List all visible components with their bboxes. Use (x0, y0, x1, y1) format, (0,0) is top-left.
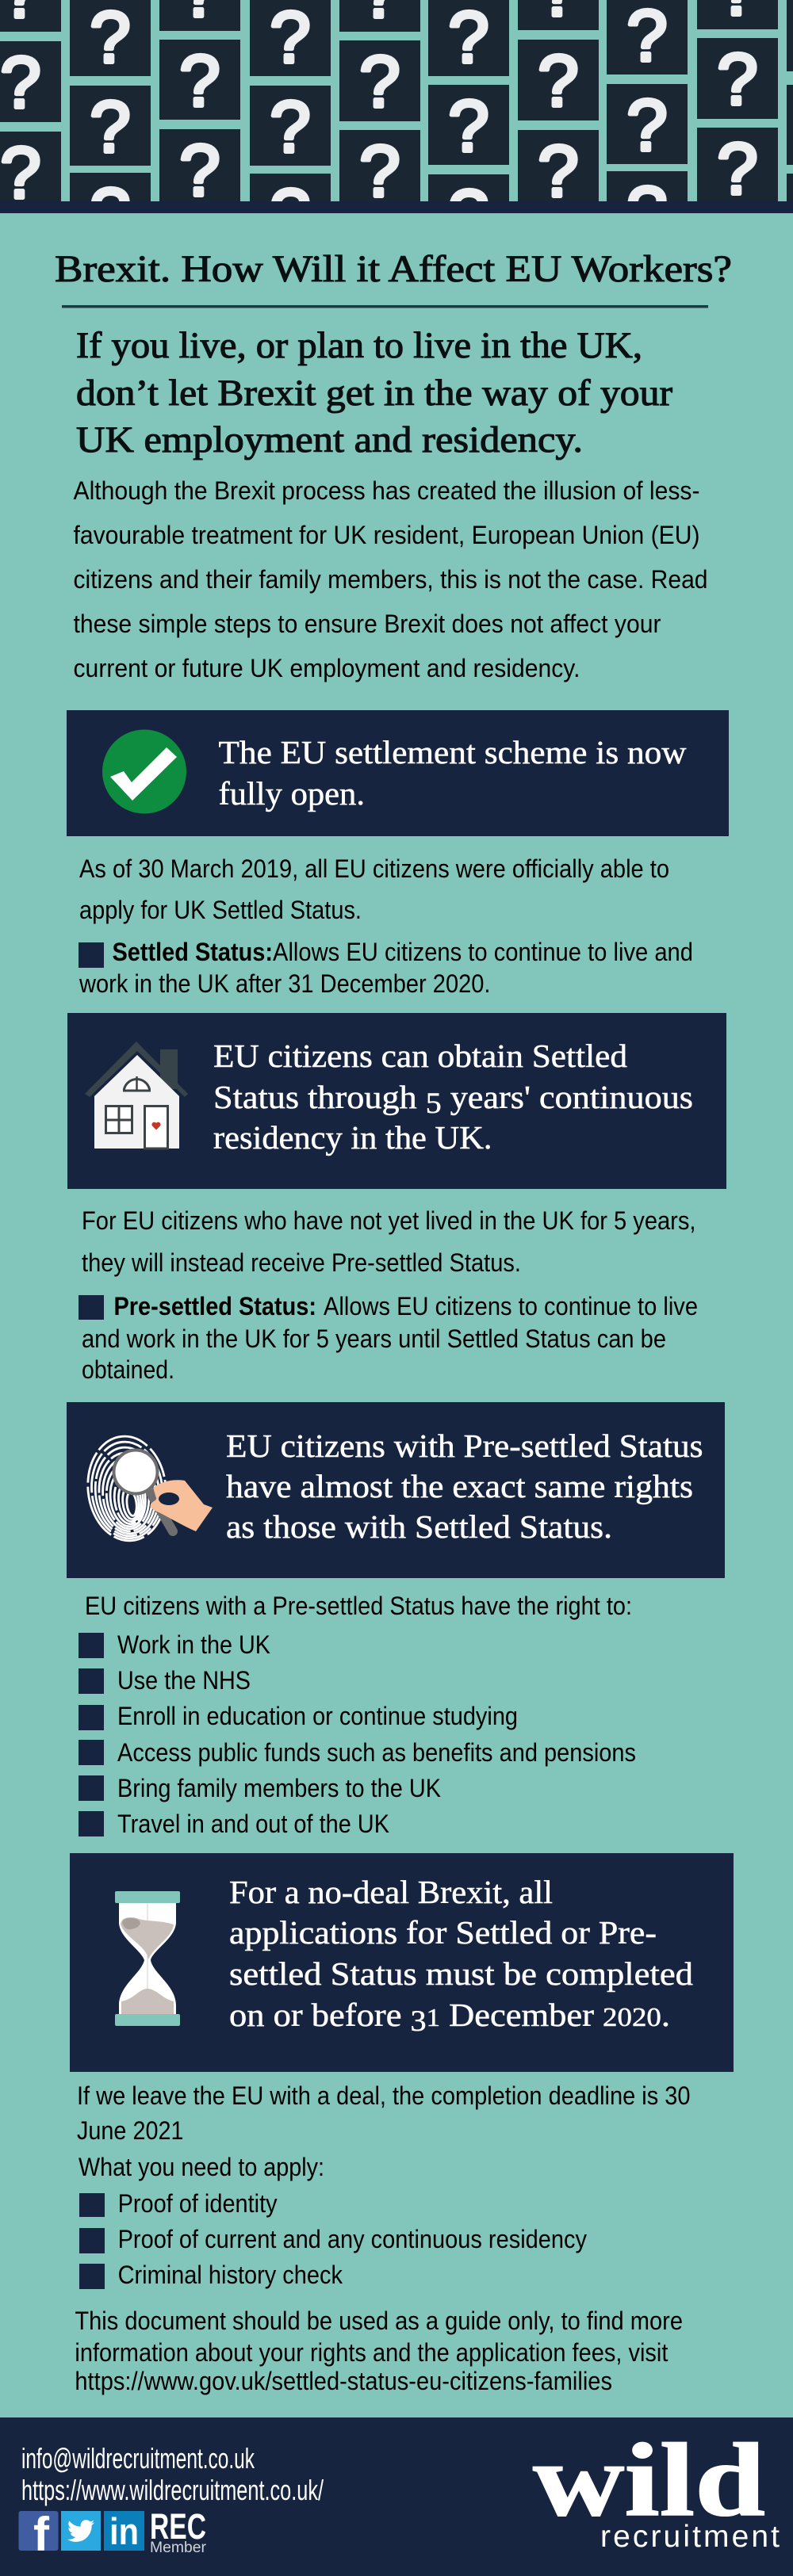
logo: REC member: Member (150, 2540, 207, 2556)
panel heading: deadline: applications for Settled or Pre- (229, 1914, 657, 1951)
panel: settlement scheme open (67, 710, 729, 836)
panel heading: pre-settled rights: as those with Settled Status. (226, 1508, 612, 1545)
panel: pre-settled rights (67, 1402, 725, 1578)
text block: pre-settled status: Allows EU citizens to continue to live (324, 1292, 698, 1320)
text block: deal deadline and requirements: What you need to apply: (79, 2153, 324, 2181)
intro paragraph: current or future UK employment and residency. (73, 654, 580, 682)
panel heading: settlement scheme: fully open. (219, 775, 365, 812)
header band: question mark tiles: ? (626, 86, 668, 166)
text block: pre-settled status (79, 1206, 698, 1384)
header band: question mark tiles: ? (90, 174, 131, 255)
header band: question mark tiles: ? (0, 43, 41, 124)
header band: question mark tiles: ? (0, 133, 41, 214)
header band: question mark tiles: ? (626, 173, 668, 254)
panel heading: pre-settled rights (226, 1428, 703, 1545)
panel heading: five years: years' continuous (442, 1079, 693, 1115)
panel heading: deadline (229, 1874, 693, 2038)
footer (0, 2417, 793, 2576)
icon: hourglass (115, 1891, 180, 2026)
text block: rights list: Bring family members to the UK (117, 1774, 441, 1802)
text block: rights list: Access public funds such as benefits and pensions (117, 1738, 636, 1767)
text block: pre-settled status: Pre-settled Status: (114, 1292, 316, 1320)
text block: guide note: information about your rights and the application fees, visit (75, 2338, 668, 2367)
panel heading: settlement scheme: The EU settlement scheme is now (219, 734, 687, 770)
header band: question mark tiles: ? (179, 130, 220, 211)
text block: rights list: Work in the UK (117, 1630, 270, 1659)
header band: question mark tiles: ? (538, 132, 579, 212)
icon: fingerprint under magnifier (82, 1432, 213, 1545)
header band: question mark tiles: ? (90, 87, 131, 168)
panel heading: pre-settled rights: have almost the exact same rights (226, 1468, 693, 1504)
text block: guide note: https://www.gov.uk/settled-status-eu-citizens-families (75, 2367, 612, 2395)
header band: question mark tiles: ? (270, 174, 311, 255)
header band: question mark tiles: ? (717, 40, 758, 120)
panel heading: five years: EU citizens can obtain Settled (213, 1038, 627, 1074)
text block: deal deadline and requirements: Criminal history check (118, 2261, 343, 2289)
header band: question mark tiles: ? (270, 87, 311, 168)
panel heading: deadline: 1 (427, 2003, 440, 2031)
subheading (76, 325, 672, 461)
text block: settled status: Allows EU citizens to continue to live and (273, 938, 693, 966)
intro paragraph: Although the Brexit process has created the illusion of less- (73, 476, 699, 505)
header band: question mark tiles: ? (448, 176, 489, 257)
icon: twitter (61, 2511, 101, 2551)
text block: settled status: work in the UK after 31 December 2020. (79, 969, 491, 998)
subheading: don’t let Brexit get in the way of your (76, 373, 672, 414)
intro paragraph: citizens and their family members, this is not the case. Read (73, 565, 707, 594)
text block: pre-settled status: obtained. (82, 1355, 174, 1384)
text block: pre-settled status: For EU citizens who have not yet lived in the UK for 5 years, (82, 1206, 696, 1235)
header band: question mark tiles: ? (717, 128, 758, 209)
subheading: If you live, or plan to live in the UK, (76, 325, 642, 366)
text block: settled status: Settled Status: (113, 938, 273, 966)
panel heading: five years (213, 1038, 693, 1156)
text block: settled status: apply for UK Settled Status. (79, 896, 362, 924)
panel heading: five years: Status through (213, 1079, 402, 1115)
header band: question mark tiles: ? (448, 86, 489, 166)
panel heading: deadline: on or before (229, 1997, 388, 2033)
text block: guide note: This document should be used as a guide only, to find more (75, 2307, 683, 2335)
panel: five years residency (67, 1013, 726, 1189)
contact details: info@wildrecruitment.co.uk (21, 2442, 255, 2475)
header band: question mark tiles: ? (538, 41, 579, 122)
intro paragraph: these simple steps to ensure Brexit does not affect your (73, 610, 661, 638)
title: Brexit. How Will it Affect EU Workers? (55, 248, 732, 290)
text block: guide note (75, 2307, 683, 2395)
text block: rights list (79, 1592, 636, 1838)
text block: deal deadline and requirements: June 2021 (77, 2116, 184, 2145)
logo: wild recruitment: recruitment (600, 2520, 780, 2554)
subheading: UK employment and residency. (76, 419, 583, 461)
panel heading: five years: residency in the UK. (213, 1119, 492, 1156)
logo: wild recruitment: wild (533, 2421, 765, 2538)
icon: linkedin: in (109, 2510, 139, 2552)
text block: deal deadline and requirements: If we leave the EU with a deal, the completion deadline is 30 (77, 2081, 690, 2110)
panel: no-deal deadline (70, 1853, 734, 2072)
panel heading: deadline: December 2020. (448, 1997, 669, 2033)
contact details: https://www.wildrecruitment.co.uk/ (21, 2474, 324, 2506)
text block: rights list: Enroll in education or continue studying (117, 1702, 518, 1730)
text block: rights list: Use the NHS (117, 1666, 251, 1695)
text block: pre-settled status: and work in the UK for 5 years until Settled Status can be (82, 1324, 666, 1353)
panel heading: deadline: 3 (411, 2005, 427, 2038)
text block: settled status (79, 854, 693, 998)
contact details (21, 2442, 324, 2506)
intro paragraph: favourable treatment for UK resident, European Union (EU) (73, 521, 699, 549)
logo: REC member: REC (150, 2506, 206, 2547)
header band: question mark tiles: ? (179, 41, 220, 122)
header band: question mark tiles: ? (359, 132, 400, 212)
header band: question mark tiles: ? (359, 41, 400, 122)
icon: facebook: f (33, 2508, 50, 2561)
title (55, 248, 732, 308)
text block: pre-settled status: they will instead receive Pre-settled Status. (82, 1248, 521, 1277)
intro paragraph (73, 476, 707, 682)
logo: REC member (150, 2506, 207, 2556)
text block: deal deadline and requirements: Proof of identity (118, 2189, 278, 2218)
text block: deal deadline and requirements (77, 2081, 690, 2289)
panel heading: deadline: For a no-deal Brexit, all (229, 1874, 553, 1910)
panel heading: five years: 5 (426, 1087, 442, 1120)
panel heading: settlement scheme (219, 734, 687, 812)
text block: rights list: Travel in and out of the UK (117, 1810, 389, 1838)
text block: settled status: As of 30 March 2019, all EU citizens were officially able to (79, 854, 669, 883)
logo: wild recruitment (533, 2421, 780, 2554)
panel heading: deadline: settled Status must be completed (229, 1955, 693, 1992)
icon: green check mark (102, 729, 186, 813)
text block: deal deadline and requirements: Proof of current and any continuous residency (118, 2225, 588, 2253)
icon: facebook (19, 2508, 59, 2561)
text block: rights list: EU citizens with a Pre-settled Status have the right to: (85, 1592, 632, 1620)
panel heading: pre-settled rights: EU citizens with Pre-settled Status (226, 1428, 703, 1464)
header band: question mark tiles (0, 0, 793, 201)
icon: house (85, 1041, 188, 1148)
